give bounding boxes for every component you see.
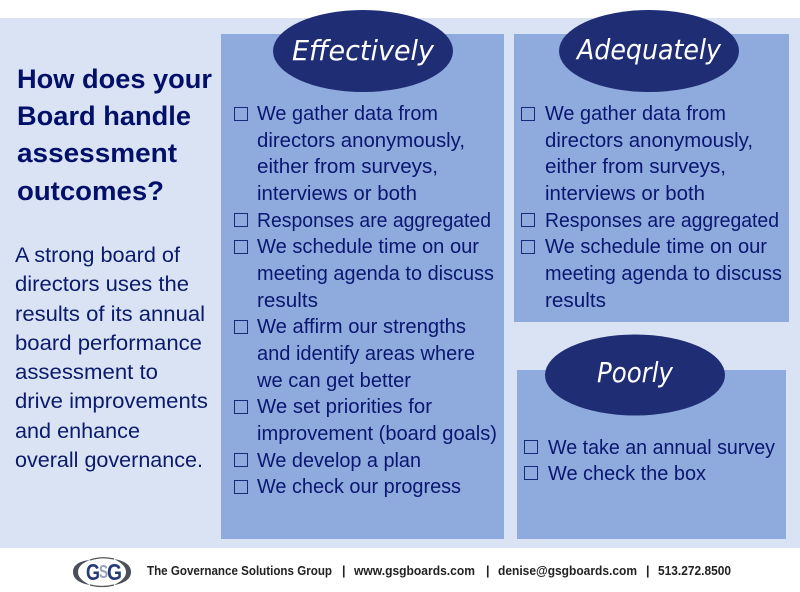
checklist: poorly: We take an annual survey	[548, 437, 775, 459]
intro text block	[15, 244, 208, 472]
title	[17, 64, 212, 206]
checklist: adequately: Responses are aggregated	[545, 210, 779, 232]
icon: GSG logo	[73, 558, 131, 586]
contact line	[147, 564, 731, 578]
checklist: poorly	[524, 437, 775, 485]
title: outcomes?	[17, 176, 164, 206]
checklist: effectively	[234, 103, 497, 498]
contact line: |	[486, 564, 490, 578]
checklist: effectively: results	[257, 290, 318, 312]
checklist: effectively: We affirm our strengths	[257, 316, 466, 338]
intro text block: board performance	[15, 332, 202, 355]
panel: poorly	[517, 334, 786, 539]
contact line: |	[646, 564, 650, 578]
intro text block: results of its annual	[15, 303, 205, 326]
badge: poorly	[545, 334, 725, 416]
checklist: effectively: We gather data from	[257, 103, 438, 125]
contact line: denise@gsgboards.com	[498, 564, 637, 578]
checklist: effectively: We develop a plan	[257, 450, 421, 472]
checklist: effectively: either from surveys,	[257, 156, 438, 178]
checklist: effectively: Responses are aggregated	[257, 210, 491, 232]
intro text block: assessment to	[15, 361, 158, 384]
checklist: effectively: we can get better	[256, 370, 411, 392]
badge: adequately	[559, 10, 739, 92]
checklist: effectively: We schedule time on our	[257, 236, 479, 258]
checklist: effectively: and identify areas where	[257, 343, 475, 365]
intro text block: directors uses the	[15, 273, 189, 296]
checklist: adequately: meeting agenda to discuss	[545, 263, 782, 285]
badge: adequately: Adequately	[575, 33, 721, 66]
badge: effectively: Effectively	[292, 34, 434, 67]
checklist: poorly: We check the box	[548, 463, 706, 485]
checklist: adequately: interviews or both	[545, 183, 705, 205]
intro text block: and enhance	[15, 420, 140, 443]
icon: GSG logo: S	[99, 562, 108, 582]
panel: effectively	[221, 10, 504, 539]
intro text block: A strong board of	[15, 244, 180, 267]
intro text block: drive improvements	[15, 390, 208, 413]
title: How does your	[17, 64, 212, 94]
checklist: adequately: results	[545, 290, 606, 312]
checklist: effectively: improvement (board goals)	[257, 423, 497, 445]
title: Board handle	[17, 101, 191, 131]
icon: GSG logo: G	[86, 559, 100, 585]
checklist: effectively: We set priorities for	[257, 396, 432, 418]
checklist: adequately: We schedule time on our	[545, 236, 767, 258]
checklist: adequately: We gather data from	[545, 103, 726, 125]
checklist: effectively: directors anonymously,	[257, 130, 465, 152]
panel: adequately	[514, 10, 789, 322]
badge: effectively	[273, 10, 453, 92]
icon: GSG logo: G	[107, 559, 122, 585]
checklist: effectively: We check our progress	[257, 476, 461, 498]
checklist: effectively: interviews or both	[257, 183, 417, 205]
checklist: adequately	[522, 103, 782, 312]
contact line: |	[342, 564, 346, 578]
contact line: 513.272.8500	[658, 564, 731, 578]
footer	[73, 558, 731, 586]
checklist: effectively: meeting agenda to discuss	[257, 263, 494, 285]
badge: poorly: Poorly	[597, 356, 673, 389]
title: assessment	[17, 138, 177, 168]
intro text block: overall governance.	[15, 449, 203, 472]
checklist: adequately: either from surveys,	[545, 156, 726, 178]
contact line: The Governance Solutions Group	[147, 564, 332, 578]
contact line: www.gsgboards.com	[353, 564, 475, 578]
checklist: adequately: directors anonymously,	[545, 130, 753, 152]
